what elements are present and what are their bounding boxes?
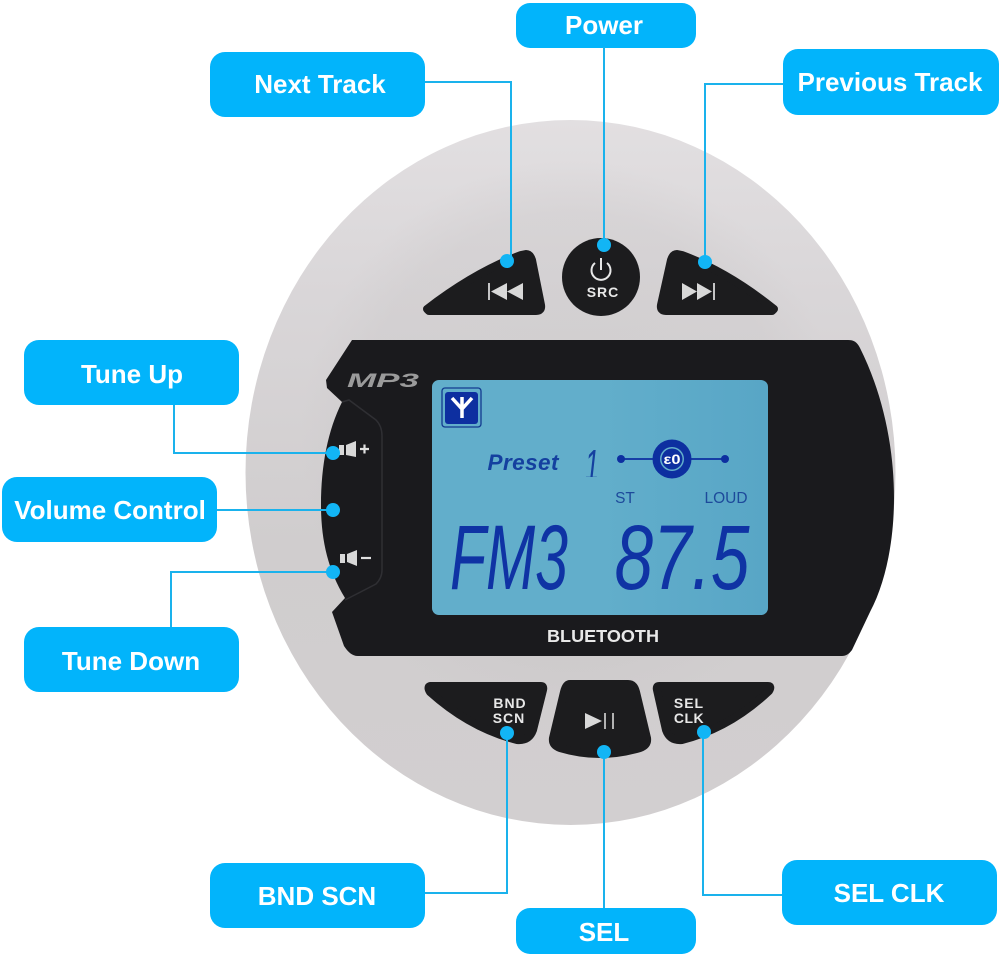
- antenna icon: [442, 388, 481, 427]
- preset number: 1: [585, 441, 599, 490]
- bluetooth label: BLUETOOTH: [547, 626, 659, 646]
- callout: Tune Down: Tune Down: [62, 646, 200, 676]
- callout: Next Track: Next Track: [254, 69, 386, 99]
- callout: Next Track: [210, 52, 514, 268]
- callout: Previous Track: [698, 49, 999, 269]
- button: SEL CLK: CLK: [674, 710, 704, 726]
- button: previous: [427, 254, 541, 311]
- black display panel: [321, 340, 894, 656]
- LCD screen: [432, 380, 768, 615]
- button: play pause: [553, 684, 647, 754]
- volume down icon: [340, 550, 371, 566]
- callout: BND SCN: [210, 726, 514, 928]
- callout: BND SCN: BND SCN: [258, 881, 376, 911]
- preset label: Preset: [488, 450, 560, 475]
- callout: SEL CLK: SEL CLK: [834, 878, 945, 908]
- callout: Power: Power: [565, 10, 643, 40]
- button: BND SCN: BND: [493, 695, 527, 711]
- callout: Tune Up: Tune Up: [81, 359, 183, 389]
- frequency readout: 87.5: [614, 507, 750, 609]
- volume button outline: [342, 400, 382, 600]
- ST label: ST: [615, 490, 635, 507]
- callout: SEL: [516, 745, 696, 954]
- button: power SRC: [562, 238, 640, 316]
- button: next: [661, 254, 774, 311]
- callout: Previous Track: Previous Track: [798, 67, 983, 97]
- callout: Tune Down: [24, 565, 340, 692]
- button: SEL CLK: SEL: [674, 695, 704, 711]
- callout: Power: [516, 3, 696, 252]
- MP3 logo: MP3: [347, 371, 420, 392]
- callout: SEL CLK: [697, 725, 997, 925]
- callout: Volume Control: [2, 477, 340, 542]
- button: power SRC: SRC: [587, 284, 619, 300]
- device body: [246, 120, 896, 825]
- callout: SEL: SEL: [579, 917, 629, 947]
- band readout: FM3: [450, 507, 568, 609]
- callout: Tune Up: [24, 340, 340, 460]
- button: BND SCN: SCN: [493, 710, 525, 726]
- volume up icon: [339, 441, 369, 457]
- button: BND SCN: [428, 686, 543, 740]
- EQ indicator: [617, 440, 729, 478]
- button: SEL CLK: [657, 686, 770, 740]
- callout: Volume Control: Volume Control: [14, 495, 206, 525]
- EQ indicator: ε0: [664, 451, 681, 467]
- LOUD label: LOUD: [704, 490, 748, 507]
